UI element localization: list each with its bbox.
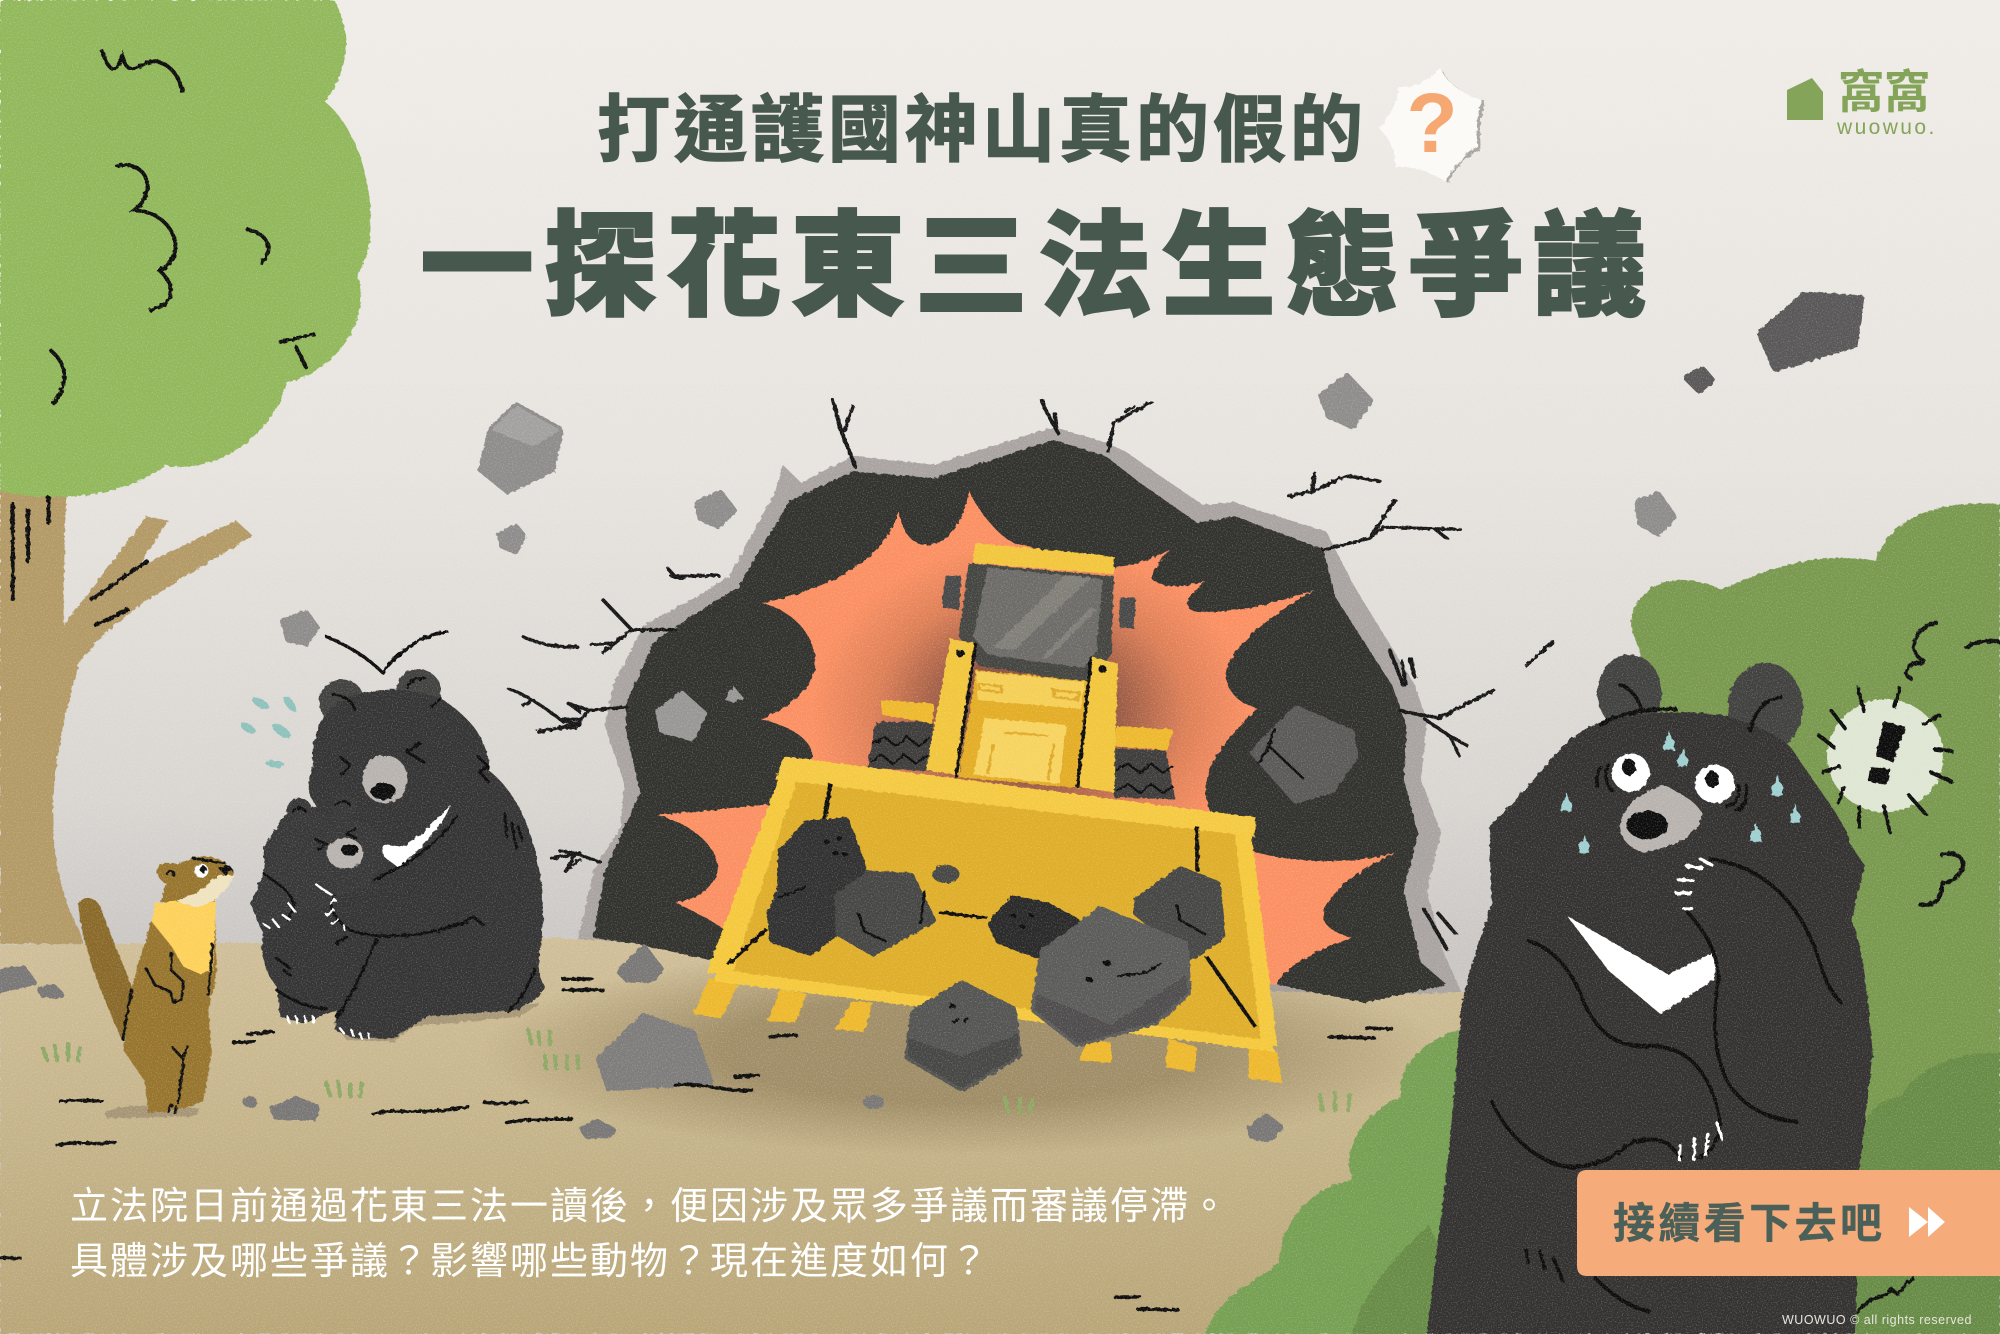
cab frame — [959, 563, 1114, 683]
crack above mother bear — [327, 632, 447, 673]
bear ink lines — [1492, 685, 1840, 1311]
body panel — [973, 718, 1066, 784]
title line two: 一探花東三法生態爭議 — [420, 204, 1656, 331]
title line one: 打通護國神山真的假的 — [597, 90, 1367, 171]
mother bear claws — [287, 900, 369, 1038]
ground ink marks and grass — [0, 979, 1392, 1310]
burst card — [1379, 68, 1482, 182]
sweat drops — [1561, 730, 1800, 853]
medium rock — [838, 874, 932, 953]
bucket side rims — [706, 779, 1278, 1046]
continue button — [1577, 1170, 2000, 1276]
small wall rocks — [283, 295, 1861, 643]
tree — [0, 0, 371, 944]
intro paragraph — [70, 1186, 1230, 1283]
wall cracks — [508, 400, 1553, 949]
cub nose — [341, 844, 359, 856]
front rock shaded facet — [908, 1034, 1018, 1088]
mother bear body — [250, 690, 545, 1038]
bucket teeth — [693, 978, 1282, 1083]
marten body — [123, 907, 217, 1113]
engine body — [959, 670, 1088, 788]
bear ears — [1597, 655, 1662, 731]
marten and bears — [78, 669, 545, 1118]
lower left bush — [1205, 1027, 1594, 1334]
exclamation bubble — [1818, 688, 1952, 832]
bear eyes — [1612, 753, 1735, 803]
arm ink lines and bolts — [956, 643, 1106, 787]
bush ink lines — [1857, 622, 2000, 1312]
teardrops — [239, 694, 298, 768]
mother bear — [250, 669, 545, 1042]
logo house — [1787, 78, 1823, 120]
logo — [1787, 66, 1937, 139]
marten shadow — [105, 1106, 200, 1118]
cab mirrors — [942, 575, 1136, 629]
marten tail — [78, 898, 132, 1040]
rock cracks and faces — [778, 887, 1207, 1023]
right bushes — [1205, 503, 2000, 1334]
marten cream muzzle — [177, 875, 234, 907]
intro line one: 立法院日前通過花東三法一讀後，便因涉及眾多爭議而審議停滯。 — [70, 1186, 1230, 1228]
rear tyres — [867, 721, 1175, 800]
glass reflections — [993, 575, 1097, 659]
button background — [1577, 1170, 2000, 1276]
large upper left rock — [481, 406, 560, 491]
tall dark rock — [771, 821, 863, 953]
body upper band — [976, 671, 1085, 709]
mother bear ears — [319, 679, 364, 724]
mother bear mouth — [371, 783, 396, 800]
icon: fast forward arrow — [1909, 1207, 1945, 1237]
front bottom rock — [908, 984, 1018, 1088]
small black rock — [992, 899, 1075, 955]
grey rim of the broken wall — [577, 427, 1464, 998]
bear cub — [251, 795, 383, 930]
ground — [0, 936, 1560, 1334]
lift arms — [926, 639, 1118, 793]
mother bear shadow — [333, 1003, 540, 1042]
large frightened bear — [1427, 655, 1873, 1334]
question burst — [1379, 68, 1485, 184]
cub ink lines — [263, 801, 355, 920]
marten yellow chest — [152, 901, 216, 974]
exclamation mark — [1868, 721, 1906, 785]
orange explosion — [658, 491, 1395, 985]
big front rock — [1035, 910, 1187, 1044]
tree foliage — [0, 0, 371, 497]
logo wordmark: wuowuo. — [1836, 116, 1937, 139]
rocks on the ground — [0, 948, 1281, 1139]
rocks in the bucket — [771, 821, 1222, 1088]
mother bear muzzle — [362, 755, 408, 803]
dark grey rock — [1253, 708, 1355, 801]
rocks inside the hole — [659, 686, 1355, 801]
burst rays — [1818, 688, 1952, 832]
tree trunk and branches — [0, 491, 253, 944]
large grey ground rock — [599, 1017, 710, 1088]
marten head — [157, 856, 233, 905]
cab glass — [973, 567, 1102, 668]
burst shadow — [1442, 70, 1485, 184]
tiny rock — [725, 686, 744, 703]
darker bush shade — [1352, 1052, 2000, 1334]
bear muzzle — [1620, 785, 1702, 852]
cab roof — [973, 543, 1114, 574]
right rock — [1137, 870, 1222, 957]
dust shadow around the loader — [480, 945, 1440, 1155]
bubble disc — [1827, 699, 1943, 812]
bucket ink lines — [728, 784, 1256, 1027]
wheel loader — [693, 543, 1282, 1083]
mother bear chest mark — [381, 804, 451, 867]
chest mark — [1567, 916, 1716, 1014]
cub muzzle — [327, 838, 363, 869]
bear mouth — [1627, 811, 1668, 839]
bucket interior — [721, 779, 1272, 1043]
marten eye and nose — [194, 864, 233, 878]
intro line two: 具體涉及哪些爭議？影響哪些動物？現在進度如何？ — [70, 1241, 990, 1283]
big rock shaded facet — [1035, 976, 1187, 1044]
light rock — [659, 694, 704, 738]
cub claws and chest — [264, 885, 332, 928]
bucket top lip — [775, 756, 1256, 837]
logo characters: 窩窩 — [1838, 66, 1930, 118]
small ground rocks — [0, 948, 1281, 1139]
yellow-throated marten — [78, 856, 234, 1118]
copyright: WUOWUO © all rights reserved — [1782, 1313, 1972, 1327]
cub head and torso — [251, 813, 383, 930]
question mark: ? — [1406, 76, 1458, 170]
button label: 接續看下去吧 — [1613, 1200, 1885, 1247]
black hole in the wall — [593, 440, 1447, 1003]
falling rocks on the wall — [283, 295, 1861, 643]
panel ink details — [979, 683, 1079, 779]
upper bush — [1631, 503, 2000, 1334]
cub ears — [287, 798, 312, 823]
marten ink lines — [123, 858, 225, 1113]
mother bear ink lines — [277, 678, 535, 1017]
bear claws — [1676, 859, 1722, 1160]
foliage ink lines — [13, 51, 314, 625]
bear body — [1427, 712, 1873, 1334]
pebble — [932, 865, 960, 883]
fenders — [880, 700, 1173, 750]
bucket bottom lip — [715, 969, 1275, 1052]
